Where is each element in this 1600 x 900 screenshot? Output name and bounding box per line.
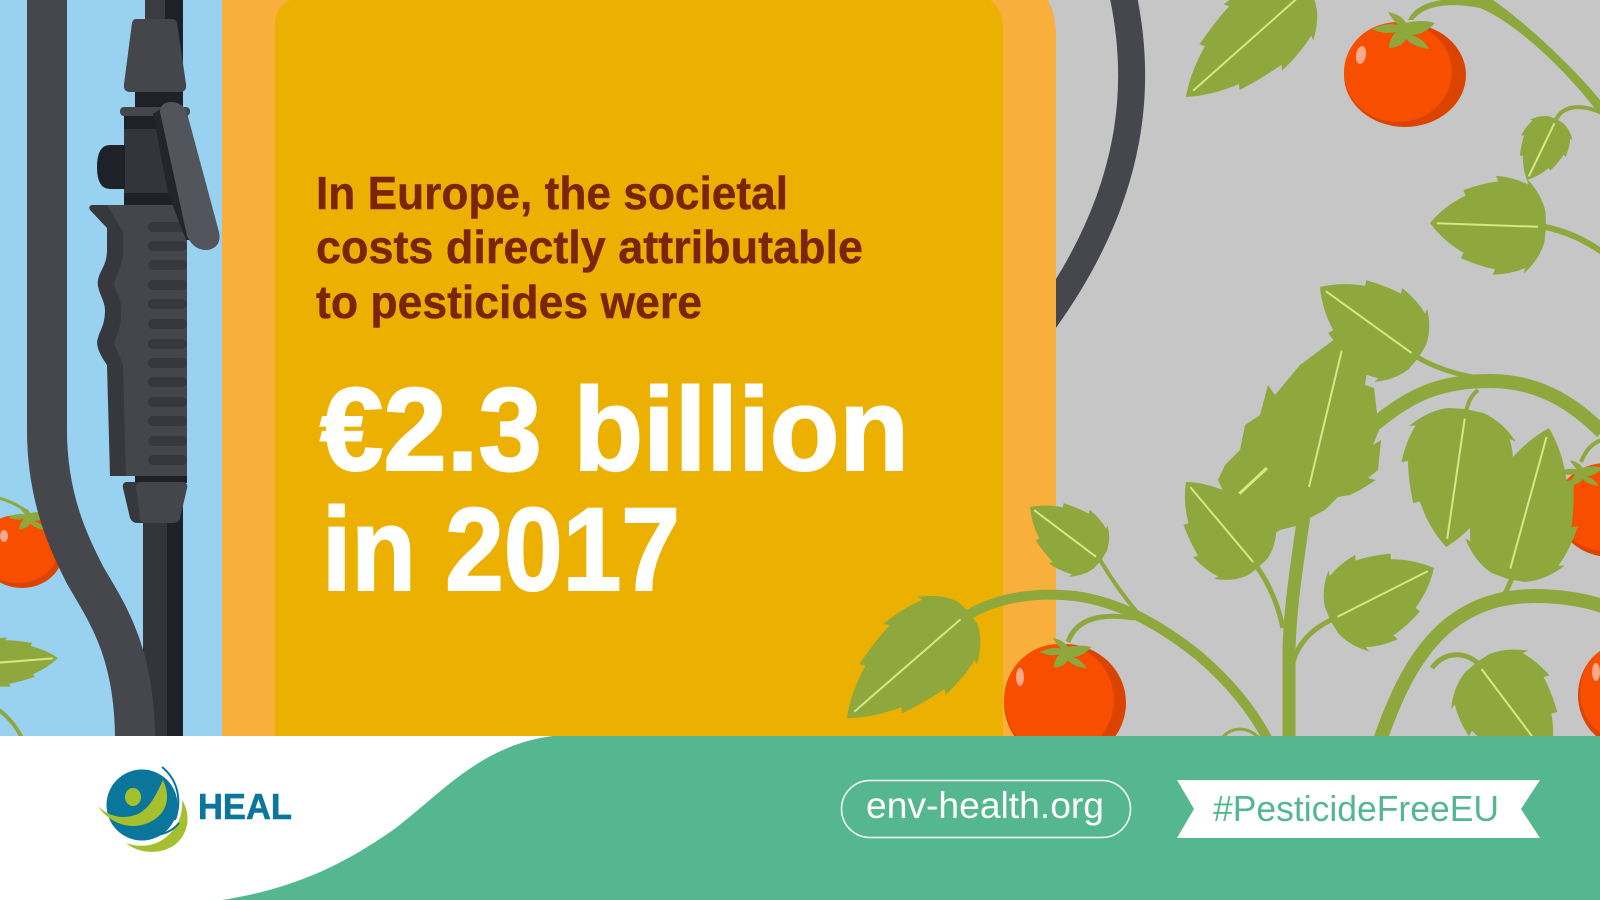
trigger lever: [160, 102, 220, 250]
panel: grey background: [1040, 0, 1600, 740]
icon: sprayer wand and handle: [89, 0, 220, 740]
side knob: [97, 145, 125, 189]
trigger lever shadow: [153, 106, 200, 240]
valve body: [120, 107, 190, 206]
icon: lower vine with leaves: [816, 480, 1268, 754]
logo: HEAL: [98, 767, 292, 852]
website pill: [842, 780, 1130, 838]
text: intro statement: In Europe, the societal: [316, 167, 788, 219]
icon: large lower leaf: [816, 576, 1000, 754]
icon: sprayer hose on the left: [47, 0, 135, 740]
panel: footer: [0, 736, 1600, 900]
icon: big central leaf: [1218, 330, 1381, 535]
icon: leaf at far left: [0, 633, 60, 690]
handle grip: [89, 205, 187, 476]
icon: top vine: [1408, 0, 1600, 115]
wand shaft: [143, 0, 183, 740]
icon: pointed hanging leaf: [1455, 414, 1600, 593]
hashtag ribbon: [1177, 780, 1540, 838]
panel: green footer wave: [222, 736, 1600, 900]
hashtag ribbon: #PesticideFreeEU: [1213, 788, 1499, 829]
icon: partly hidden right tomato: [1556, 440, 1600, 557]
icon: bottom right leaf: [1436, 632, 1590, 790]
icon: leaf lower right of central plant: [1309, 526, 1455, 663]
icon: small upper leaf on vine: [1010, 480, 1121, 587]
icon: small leaf upper right: [1505, 107, 1600, 191]
panel: orange tank: [222, 0, 1056, 740]
logo wordmark: HEAL: [198, 786, 292, 827]
icon: top leaf: [1157, 0, 1336, 130]
text: headline figure: [320, 364, 909, 616]
stem at far left: [0, 708, 22, 738]
logo mark: [98, 767, 188, 852]
icon: leaf lower left of central plant: [1153, 455, 1291, 595]
icon: top tomato: [1344, 12, 1466, 127]
handle ribs: [148, 222, 187, 465]
icon: hanging leaf: [1390, 401, 1522, 555]
website pill: env-health.org: [866, 785, 1104, 826]
icon: bottom centre tomato: [1004, 638, 1126, 762]
icon: partly hidden tomato on the left: [0, 497, 63, 588]
icon: bottom right tomato: [1578, 643, 1600, 747]
icon: leaf above central plant: [1292, 249, 1446, 396]
text: intro statement: costs directly attributable: [316, 221, 863, 273]
text: intro statement: to pesticides were: [316, 276, 702, 328]
top nozzle cap: [124, 19, 186, 92]
text: intro statement: [316, 167, 863, 328]
icon: sprayer hose on the right: [1045, 0, 1132, 320]
panel: yellow tank label: [275, 0, 1003, 740]
icon: central plant stems: [1222, 357, 1600, 740]
text: headline figure: in 2017: [322, 484, 680, 616]
icon: leaf right middle: [1428, 174, 1600, 277]
text: headline figure: €2.3 billion: [320, 364, 909, 496]
lower collar: [123, 476, 187, 523]
panel: sky background: [0, 0, 222, 740]
